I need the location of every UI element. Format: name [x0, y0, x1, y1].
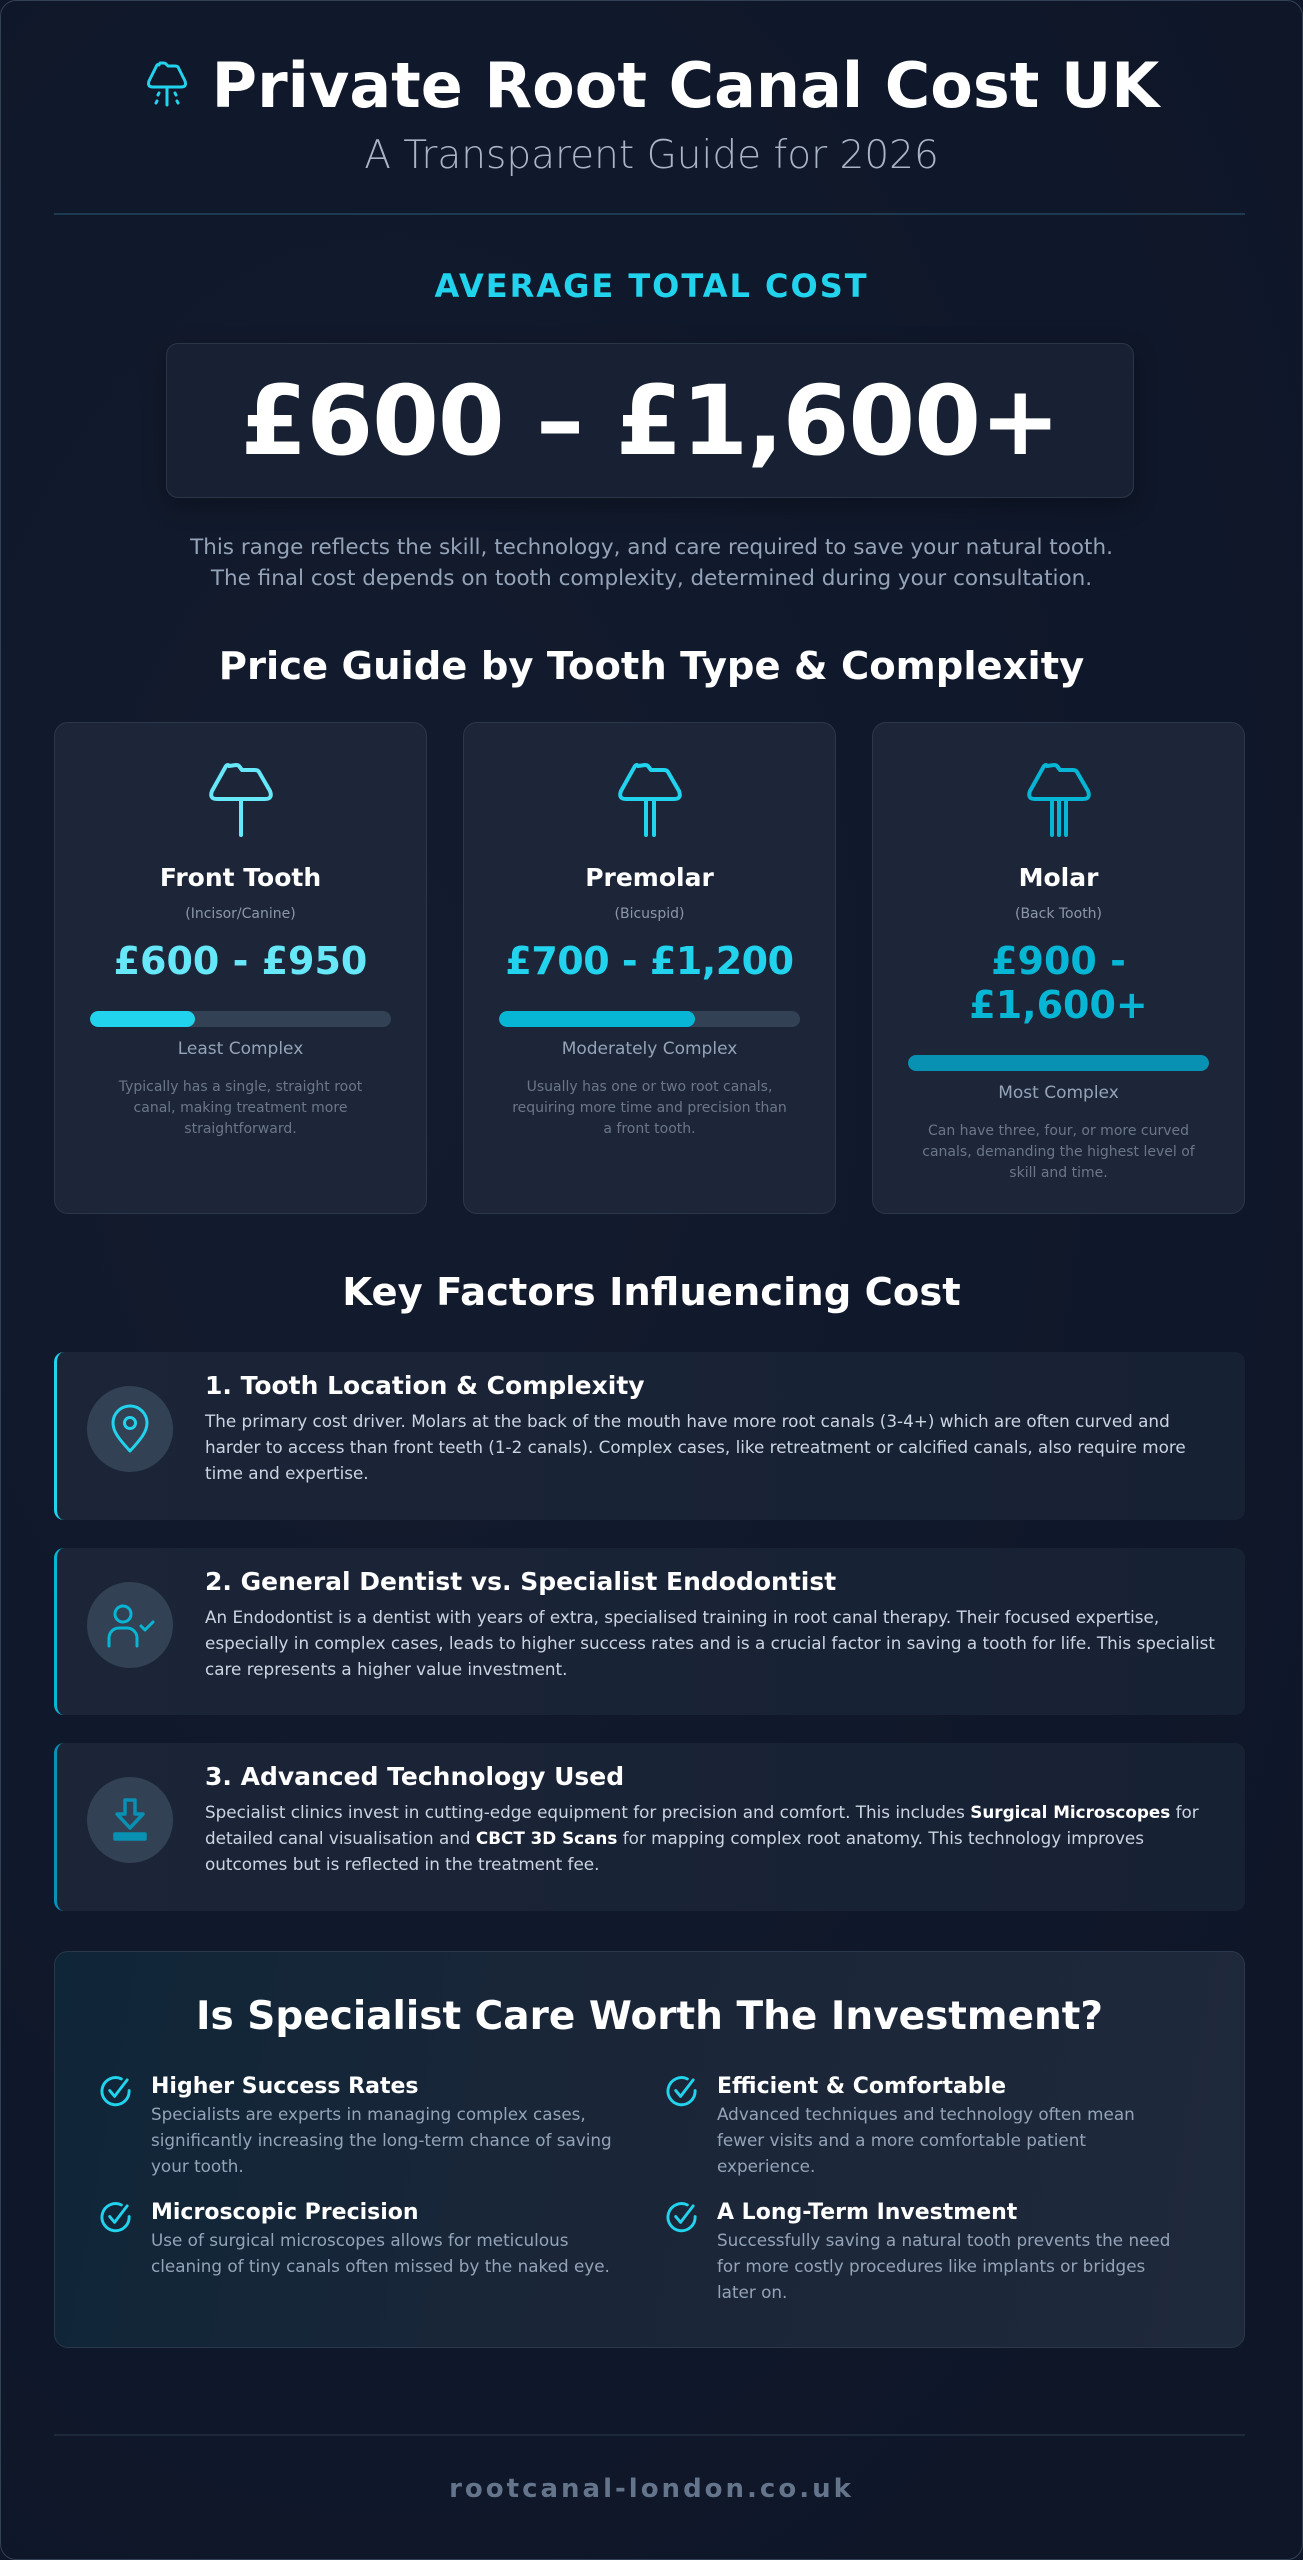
panel: factor 2: 2. General Dentist vs. Specialist Endodontist	[205, 1567, 836, 1596]
panel: factor 3: Specialist clinics invest in cutting-edge equipment for precision and comfort. This includes Surgical Microscopes for detailed canal visualisation and CBCT 3D Scans for mapping complex root anatomy. This technology improves outcomes but is reflected in the treatment fee.	[205, 1802, 1199, 1874]
subtitle: A Transparent Guide for 2026	[364, 133, 939, 178]
benefit: success: Specialists are experts in managing complex cases, significantly increasing the long-term chance of saving your tooth.	[151, 2104, 612, 2176]
panel: factor 2	[54, 1548, 1245, 1715]
icon: location pin	[87, 1386, 173, 1472]
benefit: precision	[100, 2200, 610, 2276]
panel: molar: (Back Tooth)	[1015, 906, 1102, 922]
panel: molar	[872, 722, 1245, 1214]
panel: factor 1: The primary cost driver. Molars at the back of the mouth have more root canals (3-4+) which are often curved and harder to access than front teeth (1-2 canals). Complex cases, like retreatment or calcified canals, also require more time and expertise.	[205, 1411, 1186, 1483]
panel: premolar: (Bicuspid)	[615, 906, 684, 922]
icon: technology	[87, 1777, 173, 1863]
panel: premolar: £700 - £1,200	[505, 939, 794, 983]
benefit: long-term	[666, 2200, 1170, 2302]
panel: factor 1	[54, 1352, 1245, 1520]
panel: is specialist care worth it	[54, 1951, 1245, 2348]
benefit: long-term: A Long-Term Investment	[717, 2200, 1017, 2225]
panel: factor 3: 3. Advanced Technology Used	[205, 1762, 624, 1791]
panel: molar: Can have three, four, or more curved canals, demanding the highest level of skill and time.	[922, 1123, 1195, 1181]
icon: molar	[1027, 763, 1091, 837]
benefit: efficient: Efficient & Comfortable	[717, 2074, 1006, 2099]
big price box	[166, 343, 1134, 498]
panel: molar: £1,600+	[969, 983, 1148, 1027]
benefit: efficient: Advanced techniques and technology often mean fewer visits and a more comfortable patient experience.	[717, 2104, 1135, 2176]
icon: tooth logo	[147, 62, 187, 106]
benefit: success: Higher Success Rates	[151, 2074, 418, 2099]
benefit: precision: Microscopic Precision	[151, 2200, 419, 2225]
panel: front tooth: Front Tooth	[160, 863, 321, 892]
panel: premolar: Premolar	[585, 863, 714, 892]
panel: factor 1: 1. Tooth Location & Complexity	[205, 1371, 645, 1400]
big price box: £600 – £1,600+	[241, 364, 1059, 476]
intro text: The final cost depends on tooth complexity, determined during your consultation.	[211, 566, 1092, 591]
panel: molar: Molar	[1019, 863, 1098, 892]
panel: premolar: Moderately Complex	[562, 1039, 737, 1059]
panel: factor 2: An Endodontist is a dentist with years of extra, specialised training in root canal therapy. Their focused expertise, especially in complex cases, leads to higher success rates and is a crucial factor in saving a tooth for life. This specialist care represents a higher value investment.	[205, 1607, 1215, 1679]
panel: front tooth: £600 - £950	[114, 939, 367, 983]
panel: molar: Most Complex	[998, 1083, 1119, 1103]
icon: specialist user	[87, 1582, 173, 1668]
heading: Is Specialist Care Worth The Investment?	[196, 1994, 1103, 2039]
bar: complexity	[499, 1011, 800, 1027]
footer: website: rootcanal-london.co.uk	[449, 2474, 854, 2504]
panel: front tooth: (Incisor/Canine)	[185, 906, 296, 922]
benefit: long-term: Successfully saving a natural tooth prevents the need for more costly procedures like implants or bridges later on.	[717, 2230, 1170, 2302]
panel: premolar: Usually has one or two root canals, requiring more time and precision than a front tooth.	[512, 1079, 787, 1137]
panel: front tooth: Least Complex	[178, 1039, 303, 1059]
icon: premolar	[618, 763, 682, 837]
title: Private Root Canal Cost UK	[212, 49, 1159, 122]
benefit: success	[100, 2074, 612, 2176]
bar: complexity	[908, 1055, 1209, 1071]
icon: front tooth	[209, 763, 273, 837]
heading: key factors: Key Factors Influencing Cost	[342, 1270, 961, 1315]
panel: premolar	[463, 722, 836, 1214]
panel: front tooth	[54, 722, 427, 1214]
benefit: precision: Use of surgical microscopes allows for meticulous cleaning of tiny canals often missed by the naked eye.	[151, 2230, 610, 2276]
intro text	[190, 535, 1113, 591]
panel: molar: £900 -	[991, 939, 1126, 983]
panel: factor 3	[54, 1743, 1245, 1911]
intro text: This range reflects the skill, technology, and care required to save your natural tooth.	[190, 535, 1113, 560]
heading: price guide: Price Guide by Tooth Type & Complexity	[219, 644, 1084, 689]
label: average total cost: AVERAGE TOTAL COST	[434, 267, 869, 305]
benefit: efficient	[666, 2074, 1135, 2176]
panel: front tooth: Typically has a single, straight root canal, making treatment more straightforward.	[119, 1079, 362, 1137]
bar: complexity	[90, 1011, 391, 1027]
